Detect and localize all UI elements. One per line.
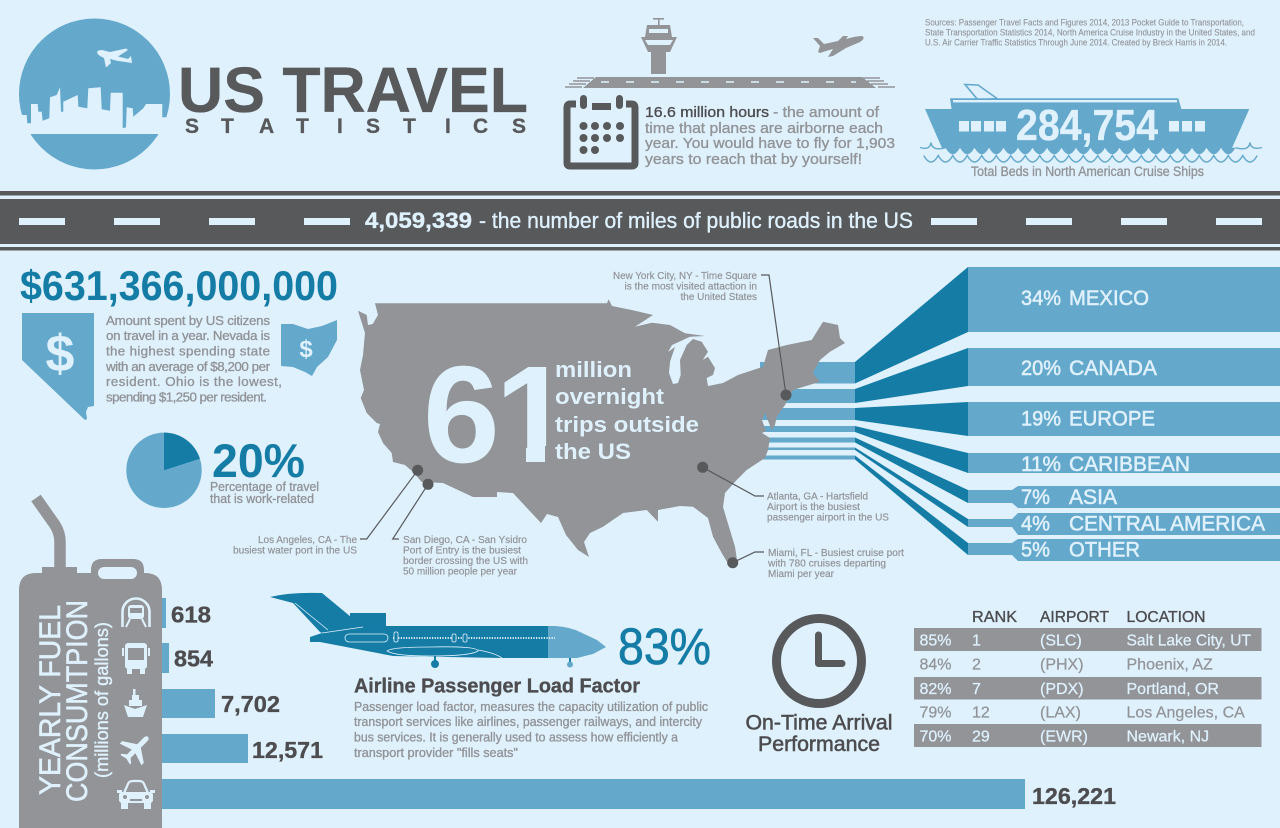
callout: New York: is the most visited attaction in	[624, 280, 757, 292]
stat: 83 percent: 83%	[618, 618, 711, 675]
destination labels: CARIBBEAN	[1069, 452, 1190, 476]
destination labels: 20%	[1021, 356, 1061, 380]
text: spending paragraph	[105, 313, 282, 404]
icon: Ohio state with dollar sign	[281, 320, 337, 376]
heading: on-time arrival: On-Time Arrival	[746, 712, 892, 734]
icon: bus	[122, 643, 150, 674]
table: airport rankings: 82%	[920, 681, 952, 698]
icon: ship	[124, 689, 147, 717]
callout: New York: New York City, NY - Time Square	[613, 270, 757, 282]
road banner	[0, 191, 1280, 250]
text: spending paragraph: the highest spending state	[106, 344, 270, 358]
can title: yearly fuel consumption	[34, 600, 112, 802]
can title: yearly fuel consumption: (millions of gallons)	[92, 622, 112, 778]
callout: Atlanta	[697, 462, 889, 524]
text: hours airborne: - the amount of	[773, 104, 880, 121]
destination labels: 5%	[1021, 538, 1050, 562]
table: airport rankings: 1	[972, 632, 981, 650]
icon: Nevada state with dollar sign: $	[46, 325, 75, 383]
icon: Nevada state with dollar sign	[22, 313, 94, 420]
cruise ship with bed count: Total Beds in North American Cruise Ships	[971, 164, 1204, 179]
destination labels: CENTRAL AMERICA	[1069, 512, 1266, 536]
destination labels: OTHER	[1069, 538, 1140, 562]
table: airport rankings: Newark, NJ	[1126, 728, 1209, 746]
text: hours airborne: time that planes are airborne each	[645, 120, 883, 137]
destination labels: 34%	[1021, 286, 1061, 310]
callout: Los Angeles	[233, 465, 423, 556]
icon: plane	[114, 726, 159, 771]
table: airport rankings: 70%	[920, 728, 952, 746]
callout: New York: the United States	[680, 291, 757, 303]
callout: Atlanta: passenger airport in the US	[767, 512, 889, 524]
text: spending paragraph: with an average of $8,200 per	[105, 359, 271, 374]
text: spending paragraph: spending $1,250 per resident.	[106, 390, 267, 404]
icon: runway	[565, 77, 895, 88]
table: airport rankings: RANK	[972, 609, 1017, 626]
text: spending paragraph: on travel in a year. Nevada is	[106, 328, 270, 343]
table: airport rankings: 2	[972, 656, 981, 674]
table: airport rankings: 79%	[920, 704, 952, 722]
table: airport rankings: (SLC)	[1040, 632, 1082, 650]
fuel values: 126,221	[1032, 783, 1116, 809]
callout: San Diego	[393, 479, 528, 578]
destination flow bars	[760, 267, 1280, 561]
callout: San Diego: Port of Entry is the busiest	[403, 544, 521, 556]
heading: on-time arrival: Performance	[758, 733, 880, 756]
callout: Miami: with 780 cruises departing	[767, 558, 886, 570]
destination labels: 7%	[1021, 485, 1050, 509]
sources	[925, 18, 1255, 48]
fuel values: 854	[174, 646, 213, 672]
table: airport rankings: (LAX)	[1040, 704, 1081, 722]
airliner illustration: 83 percent filled	[270, 593, 606, 668]
destination labels	[1021, 286, 1266, 562]
text: load factor paragraph: bus services. It is generally used to assess how efficiently a	[354, 730, 679, 744]
text: spending paragraph: resident. Ohio is the lowest,	[106, 374, 282, 389]
table: airport rankings: 84%	[920, 656, 952, 674]
text: load factor paragraph	[354, 699, 708, 760]
table: airport rankings: Phoenix, AZ	[1126, 656, 1213, 674]
text: million overnight trips: overnight	[555, 384, 665, 409]
icon: clock	[776, 618, 862, 704]
destination labels: MEXICO	[1069, 286, 1149, 310]
pie chart: 20 percent	[126, 433, 202, 508]
callout: Los Angeles: Los Angeles, CA - The	[258, 534, 357, 546]
text: load factor paragraph: Passenger load factor, measures the capacity utilization of public	[354, 699, 708, 714]
destination labels: 11%	[1021, 452, 1061, 476]
table: airport rankings: 85%	[920, 632, 952, 650]
fuel can	[19, 498, 162, 828]
sources: Sources: Passenger Travel Facts and Figures 2014, 2013 Pocket Guide to Transportation,	[925, 18, 1244, 28]
fuel values: 12,571	[252, 737, 323, 763]
destination labels: 19%	[1021, 407, 1061, 431]
cruise ship with bed count: 284,754	[1016, 101, 1158, 150]
big number: 61: 61	[423, 338, 572, 492]
stat: work-related travel: Percentage of travel	[210, 479, 319, 494]
table: airport rankings	[914, 609, 1262, 747]
heading: on-time arrival	[746, 712, 892, 756]
icon: control tower	[641, 18, 677, 74]
table: airport rankings: Salt Lake City, UT	[1126, 632, 1251, 650]
table: airport rankings: Portland, OR	[1126, 681, 1219, 698]
table: airport rankings: (EWR)	[1040, 728, 1088, 746]
text: load factor paragraph: transport services like airlines, passenger railways, and intercity	[354, 714, 702, 729]
title: STATISTICS	[185, 115, 526, 138]
stat: work-related travel	[210, 434, 319, 506]
text: hours airborne: 16.6 million hours	[645, 104, 769, 121]
callout: Miami: Miami per year	[768, 568, 834, 580]
text: hours airborne	[645, 104, 895, 168]
callout: New York	[613, 270, 792, 400]
text: million overnight trips: million	[555, 357, 632, 382]
map of the United States	[358, 299, 845, 567]
callout: San Diego: 50 million people per year	[403, 566, 517, 578]
can title: yearly fuel consumption: CONSUMTPION	[61, 600, 94, 802]
heading: load factor: Airline Passenger Load Factor	[354, 675, 640, 698]
destination labels: ASIA	[1069, 485, 1118, 509]
callout: Atlanta: Atlanta, GA - Hartsfield	[767, 490, 868, 502]
icon: train	[122, 598, 150, 627]
callout: Atlanta: Airport is the busiest	[767, 501, 860, 513]
stat: work-related travel: that is work-related	[210, 491, 314, 506]
text: spending paragraph: Amount spent by US citizens	[106, 313, 270, 328]
title: US TRAVEL	[178, 54, 528, 126]
table: airport rankings: 7	[972, 681, 981, 698]
destination labels: EUROPE	[1069, 407, 1155, 431]
table: airport rankings: LOCATION	[1126, 609, 1206, 626]
fuel values: 618	[171, 602, 211, 628]
icon: plane taking off	[813, 36, 864, 57]
text: million overnight trips: the US	[555, 439, 631, 464]
callout: Miami: Miami, FL - Busiest cruise port	[768, 547, 904, 559]
table: airport rankings: 29	[972, 728, 990, 746]
stat: work-related travel: 20%	[212, 434, 305, 487]
text: load factor paragraph: transport provider "fills seats"	[354, 745, 518, 760]
logo: city skyline in a circle	[14, 18, 175, 170]
table: airport rankings: AIRPORT	[1040, 609, 1109, 626]
callout: Miami	[727, 547, 904, 580]
text: hours airborne: year. You would have to fly for 1,903	[645, 135, 895, 152]
cruise ship with bed count	[920, 84, 1262, 179]
callout: San Diego: border crossing the US with	[403, 555, 528, 567]
text: million overnight trips	[555, 357, 699, 464]
fuel values: 7,702	[221, 691, 280, 717]
heading: total amount spent: $631,366,000,000	[20, 262, 338, 309]
icon: calendar	[567, 95, 635, 166]
callout: Los Angeles: busiest water port in the US	[233, 544, 357, 556]
destination labels: CANADA	[1069, 356, 1158, 380]
fuel consumption bars	[160, 598, 1025, 809]
fuel values	[171, 602, 1116, 809]
destination labels: 4%	[1021, 512, 1050, 536]
table: airport rankings: 12	[972, 704, 990, 722]
table: airport rankings: Los Angeles, CA	[1126, 704, 1245, 722]
callout: San Diego: San Diego, CA - San Ysidro	[403, 534, 527, 546]
road banner: 4,059,339	[365, 208, 472, 233]
road banner: - the number of miles of public roads in the US	[479, 208, 913, 233]
table: airport rankings: (PHX)	[1040, 656, 1084, 674]
text: hours airborne: years to reach that by yourself!	[645, 151, 862, 168]
table: airport rankings: (PDX)	[1040, 681, 1084, 698]
sources: U.S. Air Carrier Traffic Statistics Through June 2014. Created by Breck Harris in 2014.	[925, 38, 1227, 48]
icon: Ohio state with dollar sign: $	[299, 336, 313, 363]
can title: yearly fuel consumption: YEARLY FUEL	[34, 605, 67, 795]
icon: car	[117, 781, 155, 809]
text: million overnight trips: trips outside	[555, 412, 699, 437]
